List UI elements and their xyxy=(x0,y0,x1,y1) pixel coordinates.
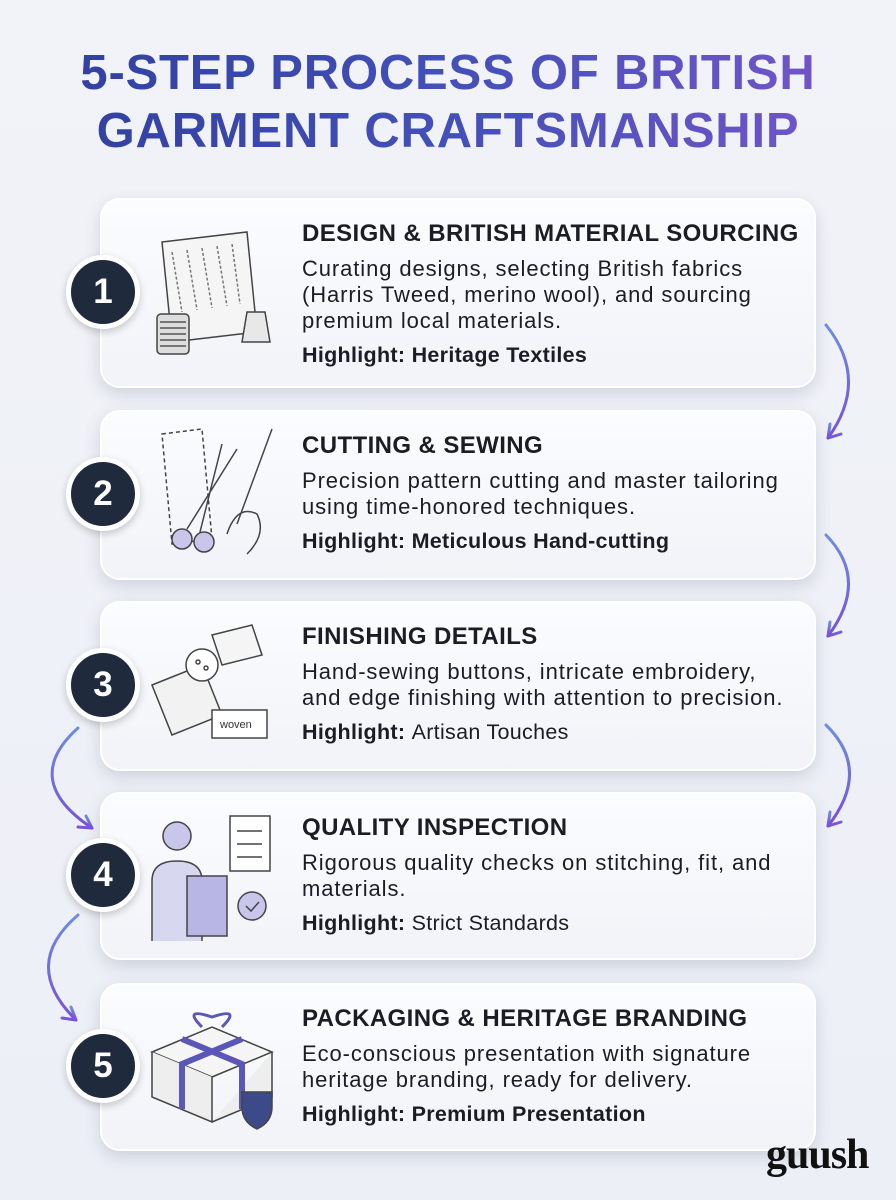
text 5: Highlight: Premium Presentation xyxy=(302,1102,646,1126)
text 5 xyxy=(302,1005,751,1126)
text 5: PACKAGING & HERITAGE BRANDING xyxy=(302,1005,747,1032)
arrow 3 to 4 left xyxy=(52,728,92,828)
icon: gift box with shield xyxy=(150,1012,274,1130)
arrow 3 to 4 right xyxy=(826,725,850,826)
text 5: Eco-conscious presentation with signature heritage branding, ready for delivery. xyxy=(302,1041,751,1092)
text 3: Hand-sewing buttons, intricate embroidery, and edge finishing with attention to precision. xyxy=(302,659,783,710)
number badge 1: 1 xyxy=(93,272,113,311)
number badge 3: 3 xyxy=(93,665,113,704)
text 1: Curating designs, selecting British fabrics (Harris Tweed, merino wool), and sourcing premium local materials. xyxy=(302,256,752,333)
icon: scissors and needle xyxy=(161,428,273,554)
text 2: Precision pattern cutting and master tailoring using time-honored techniques. xyxy=(302,468,779,519)
number badge 2: 2 xyxy=(93,474,113,513)
title: 5-STEP PROCESS OF BRITISH xyxy=(80,46,816,100)
text 1 xyxy=(302,220,799,367)
icon: button and label xyxy=(151,624,268,739)
text 4: Rigorous quality checks on stitching, fit, and materials. xyxy=(302,850,771,901)
logo: guush xyxy=(766,1132,868,1178)
text 4: QUALITY INSPECTION xyxy=(302,814,567,841)
text 1: Highlight: Heritage Textiles xyxy=(302,343,587,367)
card 5 xyxy=(100,983,816,1151)
text 4 xyxy=(302,814,771,935)
icon: button and label: woven xyxy=(219,719,252,731)
number badge 4 xyxy=(66,838,140,912)
arrow 4 to 5 left xyxy=(48,915,78,1020)
icon: inspector with checklist xyxy=(151,815,271,941)
text 2: CUTTING & SEWING xyxy=(302,432,543,459)
number badge 4: 4 xyxy=(93,855,113,894)
text 1: DESIGN & BRITISH MATERIAL SOURCING xyxy=(302,220,799,247)
text 4: Highlight: Strict Standards xyxy=(302,911,569,935)
card 3 xyxy=(100,601,816,771)
text 2: Highlight: Meticulous Hand-cutting xyxy=(302,529,669,553)
number badge 5 xyxy=(66,1029,140,1103)
title xyxy=(0,44,896,160)
text 3: FINISHING DETAILS xyxy=(302,623,538,650)
number badge 1 xyxy=(66,255,140,329)
number badge 5: 5 xyxy=(93,1046,113,1085)
text 2 xyxy=(302,432,779,553)
text 3 xyxy=(302,623,783,744)
arrow 1 to 2 xyxy=(826,325,849,438)
number badge 2 xyxy=(66,457,140,531)
number badge 3 xyxy=(66,648,140,722)
icon: fabric, spool, thimble xyxy=(156,231,271,355)
arrow 2 to 3 xyxy=(826,535,849,636)
card 4 xyxy=(100,792,816,960)
card 1 xyxy=(100,198,816,388)
text 3: Highlight: Artisan Touches xyxy=(302,720,569,744)
title: GARMENT CRAFTSMANSHIP xyxy=(97,104,799,158)
card 2 xyxy=(100,410,816,580)
